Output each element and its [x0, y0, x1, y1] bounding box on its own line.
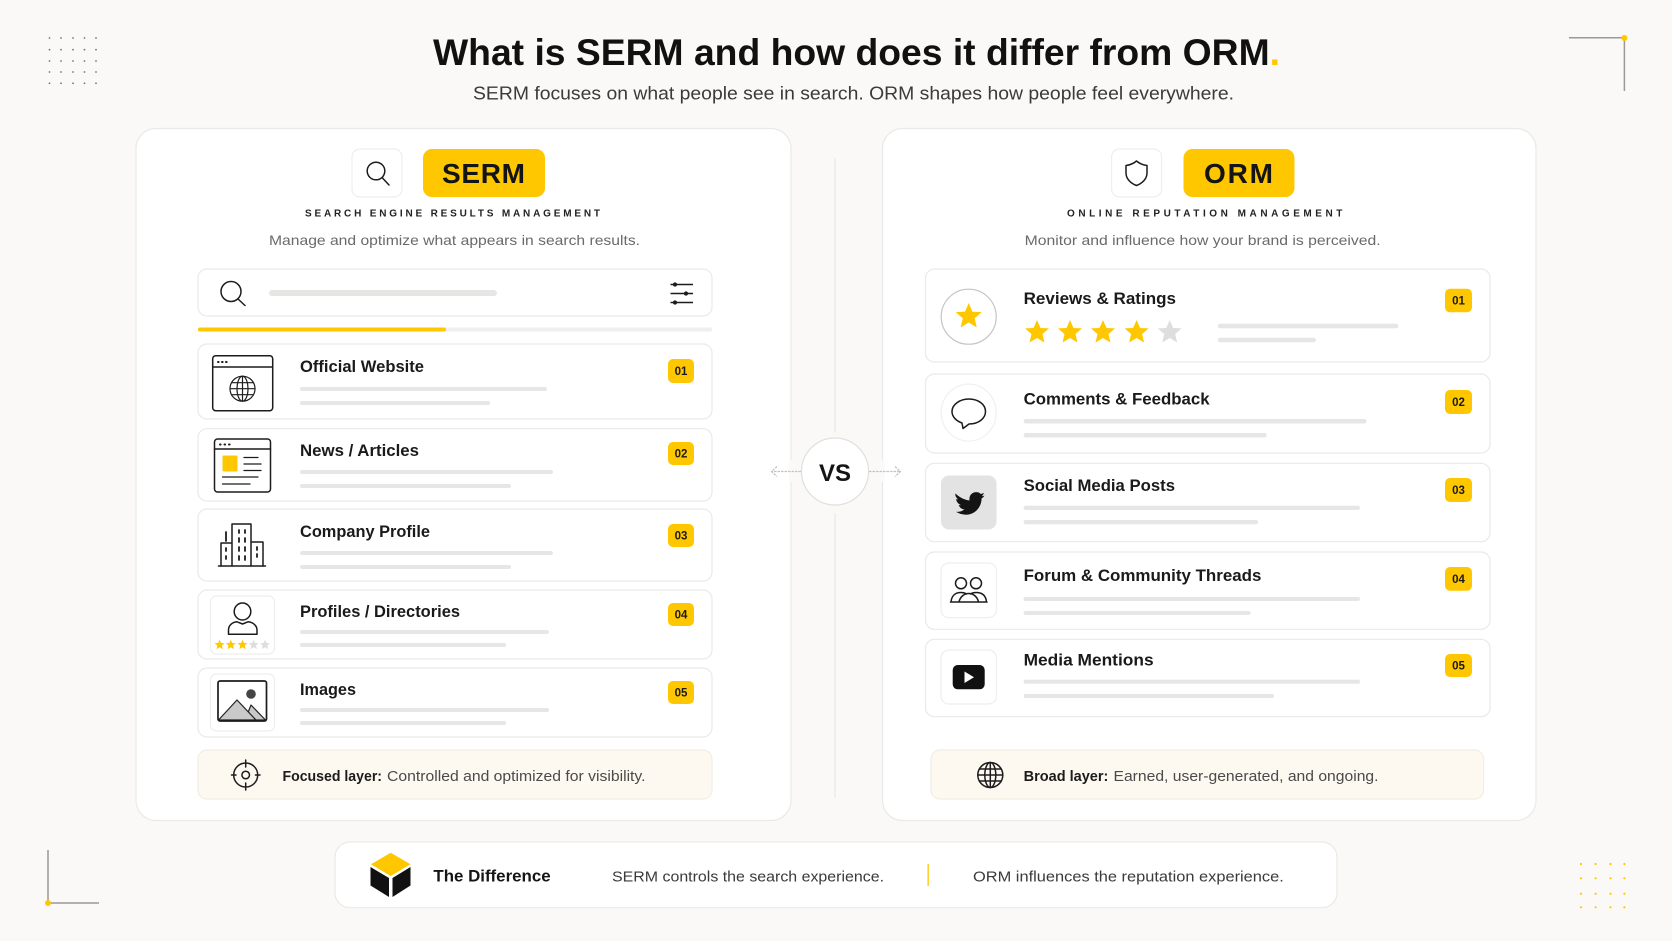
- callout: focused layer: Focused layer:: [282, 769, 382, 785]
- row: Reviews & Ratings: Reviews & Ratings: [1024, 290, 1176, 308]
- row: Company Profile: [198, 509, 712, 581]
- row: Images: [198, 668, 712, 737]
- ORM description: Monitor and influence how your brand is perceived.: [1025, 232, 1381, 248]
- VS circle: VS: [819, 460, 851, 487]
- row: Company Profile: Company Profile: [300, 523, 430, 541]
- icon: shield tile: [1112, 149, 1162, 197]
- decoration: bottom-left corner bracket: [45, 850, 99, 906]
- callout: broad layer: [931, 750, 1484, 799]
- row: News / Articles: News / Articles: [300, 442, 419, 460]
- row: Forum & Community Threads: Forum & Community Threads: [1024, 567, 1261, 585]
- icon: people: [941, 563, 996, 618]
- title: What is SERM and how does it differ from ORM.: [433, 31, 1280, 73]
- decoration: bottom-right dot grid: [1580, 863, 1626, 908]
- row: Images: 05: [675, 688, 688, 700]
- center divider: [834, 158, 836, 798]
- SERM full name: SEARCH ENGINE RESULTS MANAGEMENT: [305, 208, 600, 220]
- row: Reviews & Ratings: [926, 269, 1490, 362]
- icon: bird: [941, 476, 996, 530]
- row: Comments & Feedback: [926, 374, 1490, 453]
- arrow: right: [869, 466, 900, 476]
- icon: globe: [978, 762, 1003, 788]
- row: Social Media Posts: 03: [1452, 485, 1465, 497]
- row: Media Mentions: 05: [1452, 660, 1465, 672]
- decoration: top-right corner bracket: [1569, 35, 1627, 91]
- ORM badge: [1184, 149, 1294, 197]
- VS connector: [772, 438, 900, 505]
- subtitle: SERM focuses on what people see in search. ORM shapes how people feel everywhere.: [473, 84, 1234, 104]
- row: Images: Images: [300, 681, 356, 699]
- row: Profiles / Directories: 04: [675, 610, 688, 622]
- row: Media Mentions: Media Mentions: [1024, 651, 1154, 669]
- row: Comments & Feedback: 02: [1452, 397, 1465, 409]
- row: Forum & Community Threads: 04: [1452, 574, 1465, 586]
- SERM badge: [423, 149, 545, 197]
- row: Company Profile: 03: [675, 530, 687, 542]
- row: News / Articles: [198, 429, 712, 501]
- icon: search tile: [352, 149, 402, 197]
- row: Comments & Feedback: Comments & Feedback: [1024, 390, 1210, 408]
- decoration: top-left dot grid: [49, 37, 97, 84]
- panel: the difference: The Difference: [433, 867, 551, 886]
- callout: broad layer: Broad layer:: [1024, 769, 1108, 785]
- arrow: left: [772, 466, 801, 476]
- icon: picture: [210, 674, 274, 731]
- row: Media Mentions: [926, 639, 1490, 717]
- icon: person with rating: [210, 596, 274, 654]
- row: Social Media Posts: Social Media Posts: [1024, 477, 1175, 495]
- row: Official Website: Official Website: [300, 358, 424, 376]
- search bar: [198, 269, 712, 316]
- icon: browser with globe: [213, 356, 273, 411]
- row: Social Media Posts: [926, 463, 1490, 542]
- row: Profiles / Directories: [198, 590, 712, 659]
- icon: cube: [370, 853, 410, 897]
- panel: the difference: SERM controls the search experience.: [612, 869, 884, 886]
- callout: focused layer: Controlled and optimized for visibility.: [387, 769, 646, 785]
- panel: the difference: [335, 842, 1337, 908]
- row: Reviews & Ratings: 01: [1452, 296, 1465, 308]
- callout: broad layer: Earned, user-generated, and ongoing.: [1114, 769, 1378, 785]
- icon: crosshair target: [232, 760, 260, 790]
- SERM badge: SERM: [442, 158, 525, 189]
- panel: ORM: [882, 128, 1536, 820]
- row: Profiles / Directories: Profiles / Directories: [300, 603, 460, 621]
- panel: the difference: ORM influences the reputation experience.: [973, 869, 1284, 886]
- icon: buildings: [218, 524, 266, 566]
- icon: speech bubble: [941, 384, 996, 441]
- rating stars: [1025, 320, 1182, 343]
- callout: focused layer: [198, 750, 712, 799]
- panel: SERM: [136, 128, 791, 820]
- row: Forum & Community Threads: [926, 552, 1490, 629]
- SERM description: Manage and optimize what appears in search results.: [269, 232, 640, 248]
- row: News / Articles: 02: [675, 448, 687, 460]
- row: Official Website: 01: [675, 366, 688, 378]
- icon: play button: [941, 650, 996, 704]
- icon: star circle: [941, 289, 996, 344]
- icon: sliders: [670, 283, 693, 304]
- row: Official Website: [198, 344, 712, 419]
- progress bar: [198, 328, 712, 332]
- ORM full name: ONLINE REPUTATION MANAGEMENT: [1067, 208, 1342, 220]
- ORM badge: ORM: [1204, 158, 1273, 189]
- icon: news article: [214, 439, 270, 492]
